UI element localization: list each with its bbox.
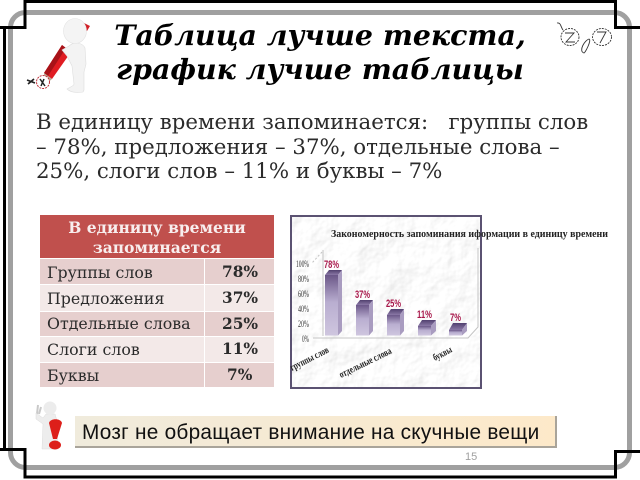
row: Группы слов [40,259,274,284]
x axis labels: отдельные слова [337,346,394,381]
bar: 11%: 11% [417,309,432,321]
bar: 25% [386,298,404,336]
row: Группы слов: 78% [222,263,258,281]
title: Таблица лучше текста, [114,18,526,52]
body text [36,110,588,184]
table header [40,215,274,258]
y axis labels: 100% [296,259,309,269]
y axis labels: 40% [298,304,309,314]
bar chart on crumpled paper [288,215,609,389]
table header: запоминается [93,238,221,257]
bar: 11% [417,309,436,336]
body text: 25%, слоги слов – 11% и буквы – 7% [36,159,442,184]
body text: В единицу времени запоминается: группы слов [36,110,588,135]
row: Отдельные слова: 25% [222,315,258,333]
table header: В единицу времени [68,218,246,237]
bar: 7% [449,312,467,336]
axis lines [312,248,478,338]
bar: 7%: 7% [450,312,461,324]
row: Отдельные слова: Отдельные слова [47,314,191,333]
row: Предложения: Предложения [47,289,164,308]
row: Предложения: 37% [222,289,258,307]
x axis labels: буквы [431,344,454,364]
row: Слоги слов: 11% [222,340,258,358]
icon: figure with red exclamation mark [36,402,62,450]
bar: 78%: 78% [324,259,339,271]
column divider [204,259,205,387]
body text: – 78%, предложения – 37%, отдельные слова – [36,134,560,160]
row: Группы слов: Группы слов [47,263,153,282]
callout: Мозг не обращает внимание на скучные вещи [82,421,539,444]
row: Слоги слов: Слоги слов [47,340,140,359]
y axis labels: 20% [298,319,309,329]
y axis labels: 0% [302,334,309,344]
y axis labels: 60% [298,289,309,299]
slide number: 15 [465,451,477,463]
table: memorisation rates [40,215,274,387]
bar: 37% [355,289,373,336]
callout [75,416,557,448]
row: Буквы: Буквы [47,366,99,385]
x axis labels: группы слов [288,345,331,374]
icon: figure with red pencil [26,18,90,93]
row: Слоги слов [40,337,274,362]
bar: 78% [324,259,342,336]
bar: 37%: 37% [355,289,370,301]
icon: circled letters ornament [556,22,612,54]
title [114,18,526,86]
row: Буквы [40,363,274,387]
title: график лучше таблицы [116,52,524,86]
row: Отдельные слова [40,312,274,336]
paper background [291,216,481,388]
bar: 25%: 25% [386,298,401,310]
y axis labels: 80% [298,274,309,284]
row: Буквы: 7% [227,366,252,384]
x axis labels [288,344,454,381]
row: Предложения [40,285,274,311]
y axis labels [296,259,309,344]
